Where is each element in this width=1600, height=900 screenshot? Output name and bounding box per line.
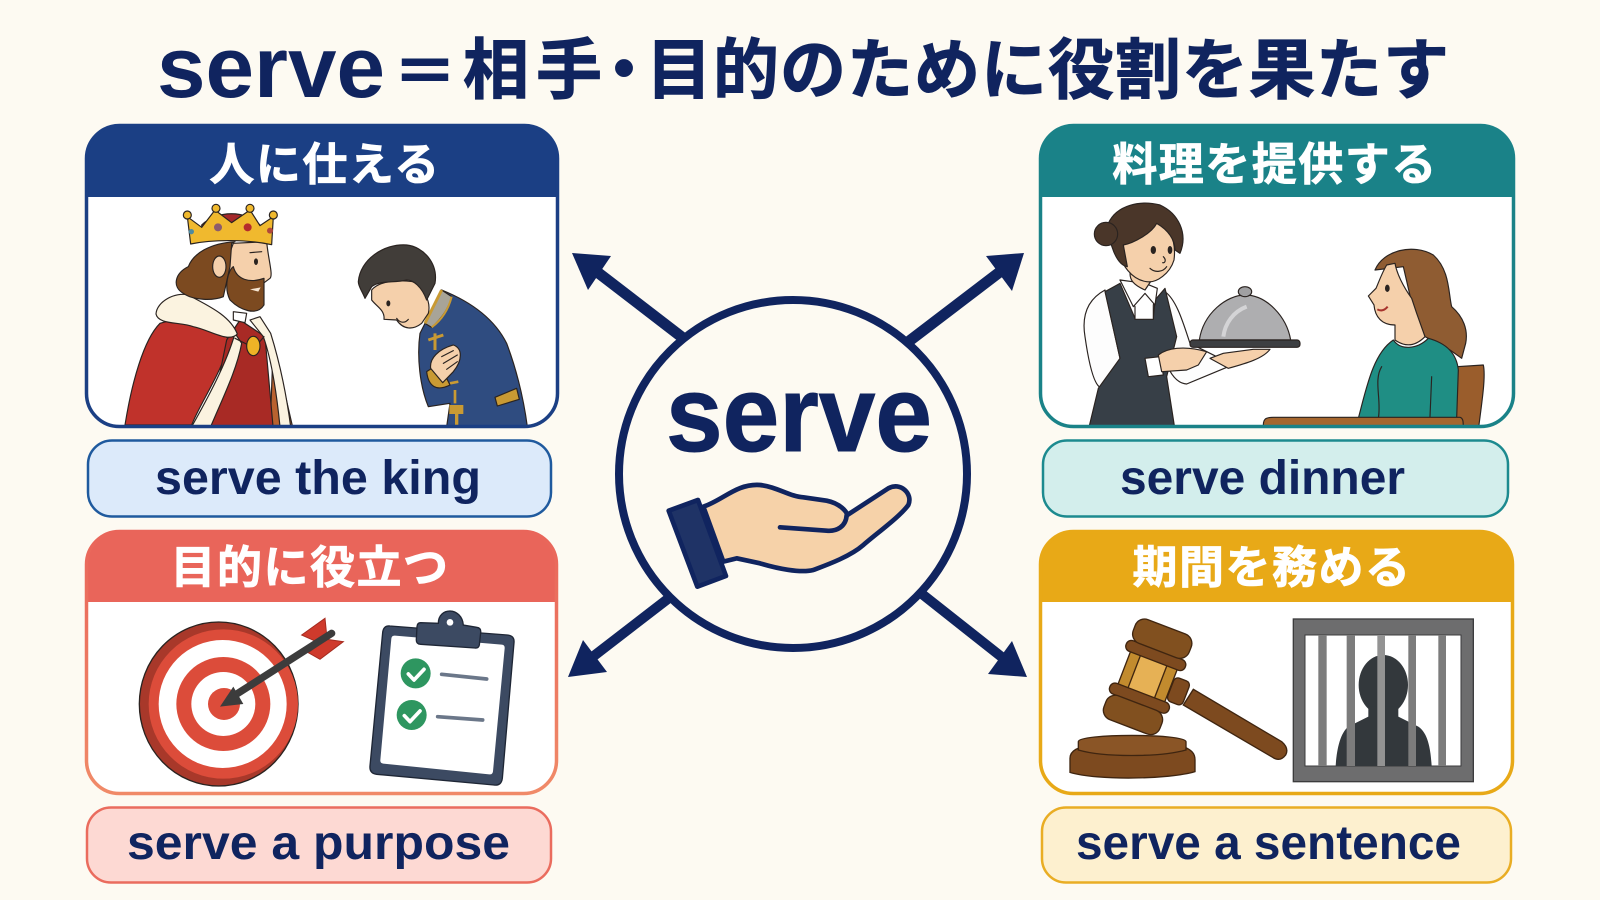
king bbox=[125, 204, 293, 430]
phrase pill: serve a sentence: serve a sentence bbox=[1076, 817, 1461, 870]
title: 手 bbox=[536, 17, 602, 113]
title: 相 bbox=[463, 17, 529, 113]
central word: serve bbox=[666, 353, 932, 474]
phrase pill: serve dinner bbox=[1043, 440, 1508, 516]
panel heading: 人に仕える bbox=[209, 128, 441, 193]
central circle with word and hand bbox=[619, 300, 967, 648]
cloche on tray bbox=[1190, 287, 1300, 347]
title: ＝ bbox=[393, 22, 457, 114]
panel: serve dinner bbox=[1039, 124, 1515, 430]
arrow: to bottom-right panel bbox=[922, 594, 1027, 677]
panel heading: 目的に役立つ bbox=[170, 531, 450, 596]
arrow: to top-right panel bbox=[908, 253, 1024, 342]
prison cell silhouette bbox=[1293, 619, 1473, 782]
panel header background bbox=[1039, 530, 1514, 602]
panel border bbox=[86, 126, 558, 426]
seated woman bbox=[1263, 249, 1484, 430]
servant bbox=[358, 245, 527, 427]
arrow: to top-left panel bbox=[572, 253, 683, 338]
panel heading: 料理を提供する bbox=[1112, 128, 1438, 193]
panel border bbox=[1040, 126, 1514, 426]
clipboard with checklist bbox=[370, 611, 514, 785]
panel: serve the king bbox=[85, 124, 559, 430]
panel header background bbox=[85, 124, 559, 197]
title bbox=[157, 17, 1450, 116]
arrow: to bottom-left panel bbox=[568, 598, 669, 677]
illustration: target and clipboard bbox=[139, 611, 514, 786]
panel header background bbox=[85, 530, 558, 602]
panel border bbox=[1040, 532, 1512, 794]
target with arrow bbox=[139, 618, 343, 786]
icon: open hand bbox=[669, 485, 909, 587]
phrase pill: serve the king bbox=[88, 440, 551, 516]
gavel bbox=[1070, 616, 1287, 778]
title: 目的のために役割を果たす bbox=[646, 17, 1450, 113]
phrase pill: serve a purpose bbox=[87, 808, 551, 882]
illustration: king and bowing servant bbox=[125, 204, 527, 430]
title: serve bbox=[157, 20, 385, 116]
phrase pill: serve a purpose: serve a purpose bbox=[127, 817, 510, 870]
phrase pill: serve dinner: serve dinner bbox=[1120, 452, 1405, 505]
title: ・ bbox=[591, 17, 657, 113]
panel: serve a purpose bbox=[85, 530, 558, 794]
illustration: gavel and prison cell bbox=[1070, 616, 1473, 782]
phrase pill: serve a sentence bbox=[1042, 808, 1511, 882]
panel heading: 期間を務める bbox=[1132, 531, 1412, 596]
waitress bbox=[1084, 203, 1270, 430]
panel header background bbox=[1039, 124, 1515, 197]
panel: serve a sentence bbox=[1039, 530, 1514, 794]
panel border bbox=[86, 532, 556, 794]
illustration: waitress serving a seated woman bbox=[1084, 203, 1484, 430]
phrase pill: serve the king: serve the king bbox=[155, 452, 481, 505]
